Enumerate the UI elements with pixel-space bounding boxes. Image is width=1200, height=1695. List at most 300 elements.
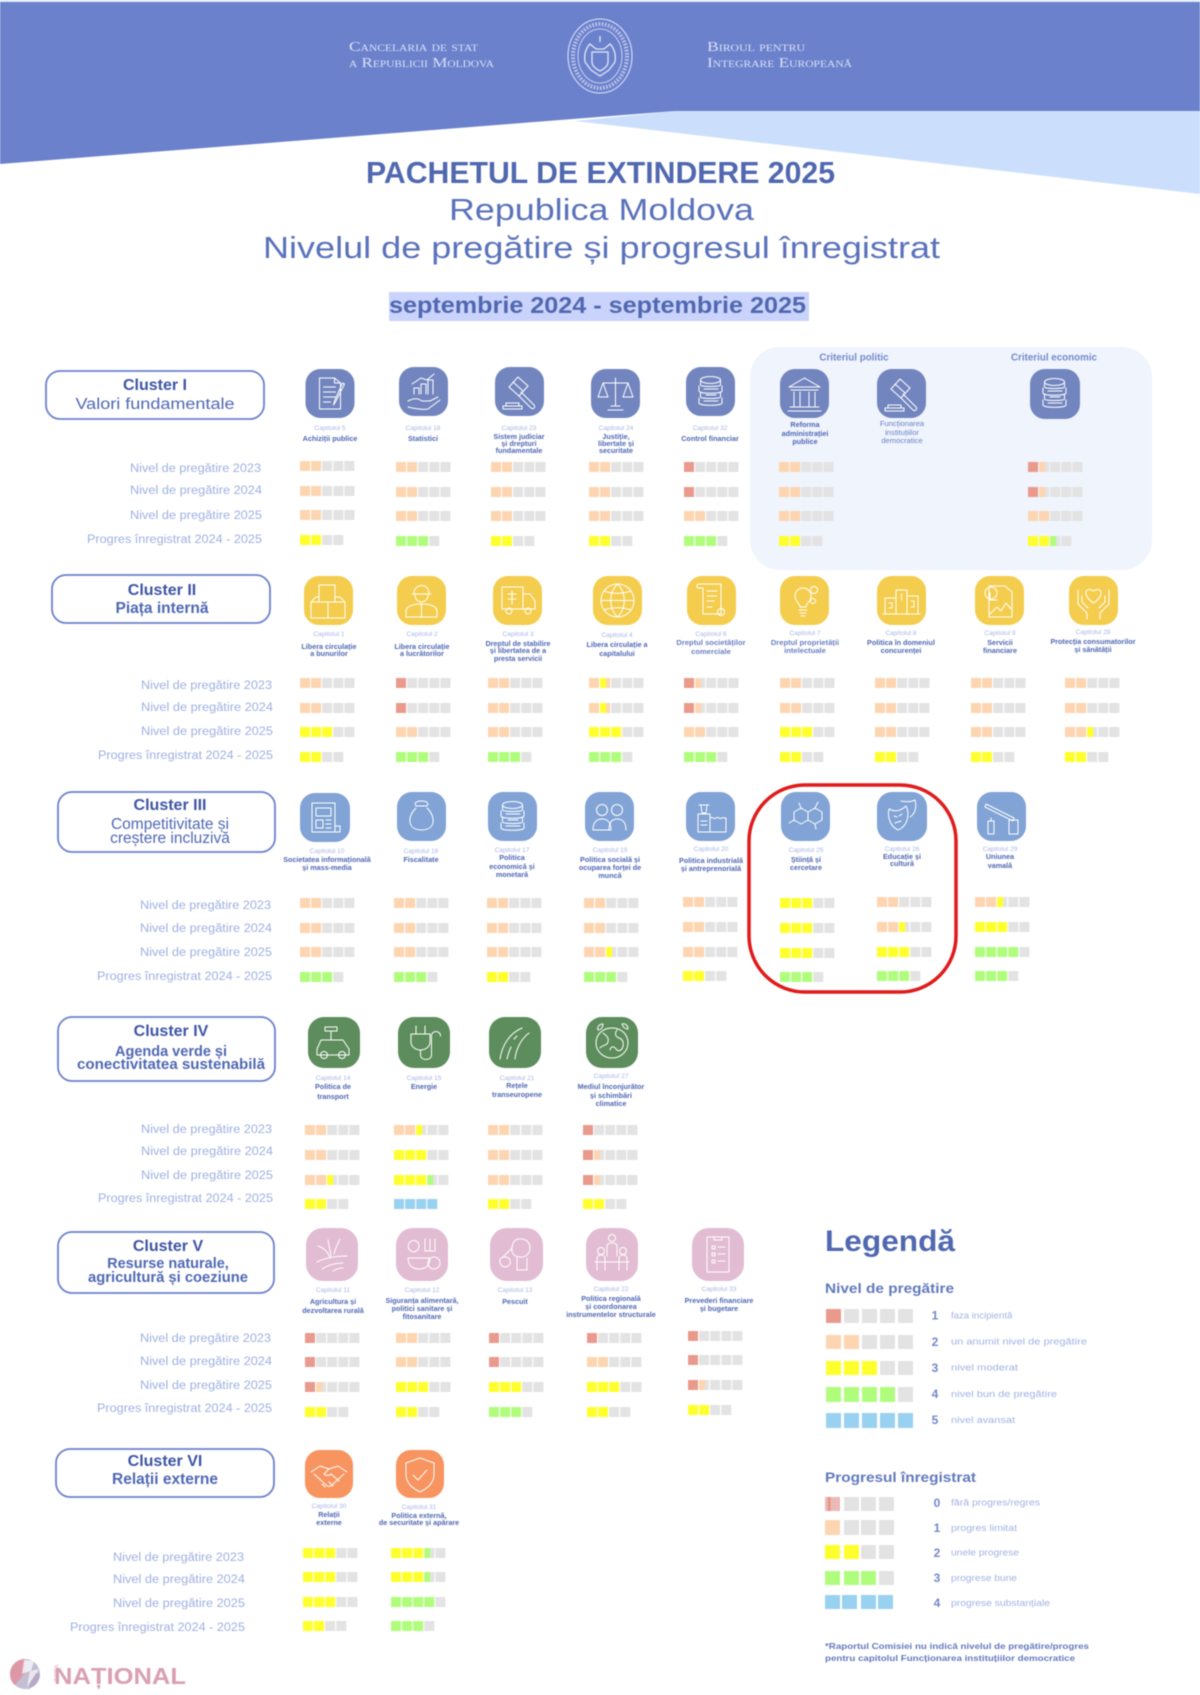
header text right: Biroul pentru Integrare Europeana: Biroul pentru xyxy=(707,39,806,54)
caption: a lucrătorilor xyxy=(400,649,444,658)
caption xyxy=(586,632,649,658)
icon: coins xyxy=(488,792,537,841)
legend row 3 xyxy=(826,1361,1018,1375)
legend progress row 1: progres limitat xyxy=(951,1523,1017,1534)
caption xyxy=(681,425,739,443)
caption: Capitolul 17 xyxy=(495,847,530,854)
caption: a bunurilor xyxy=(310,649,348,658)
icon: podium xyxy=(877,576,926,625)
caption: Capitolul 33 xyxy=(702,1286,737,1293)
chapter 31 xyxy=(379,1450,459,1631)
caption: Capitolul 28 xyxy=(1076,629,1111,636)
caption: Capitolul 29 xyxy=(983,846,1018,853)
chapter 10 xyxy=(283,793,372,982)
caption: Capitolul 1 xyxy=(313,631,345,638)
caption: Control financiar xyxy=(681,434,739,443)
caption: Capitolul 18 xyxy=(406,425,441,432)
caption: climatice xyxy=(596,1099,626,1108)
chapter 30 xyxy=(303,1450,357,1631)
functioning of democratic institutions xyxy=(877,369,926,445)
legend progress row 0: 0 xyxy=(934,1496,941,1510)
ratings xyxy=(396,462,450,546)
caption: Capitolul 9 xyxy=(984,630,1016,637)
chapter 33 xyxy=(685,1228,753,1415)
ratings xyxy=(300,461,354,545)
legend row 4: 4 xyxy=(932,1387,939,1401)
legend progress row 1 xyxy=(825,1520,1017,1535)
caption: Politica în domeniul xyxy=(867,638,935,647)
header text right: Biroul pentru Integrare Europeana xyxy=(707,39,853,70)
row labels: Nivel de pregătire 2024 xyxy=(141,1146,274,1158)
ratings xyxy=(584,898,638,982)
cluster label: Agenda verde și xyxy=(115,1044,227,1060)
ratings xyxy=(489,1333,543,1417)
ratings xyxy=(684,462,738,546)
chapter 12 xyxy=(385,1228,459,1417)
caption: Protecția consumatorilor xyxy=(1050,637,1136,646)
caption xyxy=(302,1287,365,1315)
legend row 2: 2 xyxy=(932,1335,939,1349)
icon: molecule xyxy=(781,792,830,841)
chapter 14 xyxy=(305,1017,360,1209)
caption: Energie xyxy=(411,1082,437,1091)
cluster label: Cluster VI xyxy=(128,1453,202,1470)
cluster label: Valori fundamentale xyxy=(76,396,234,413)
legend progress row 2: unele progrese xyxy=(951,1548,1019,1558)
icon: checklist xyxy=(692,1228,744,1281)
highlight: red rounded outline xyxy=(749,785,956,992)
caption: Capitolul 27 xyxy=(594,1073,629,1080)
caption: Capitolul 16 xyxy=(404,848,439,855)
caption xyxy=(883,846,921,868)
header band xyxy=(0,0,1200,194)
caption: fundamentale xyxy=(496,446,542,455)
icon: food basket xyxy=(396,1228,448,1281)
cluster label: Resurse naturale, xyxy=(107,1256,229,1272)
caption: și bugetare xyxy=(700,1304,738,1313)
caption: Capitolul 13 xyxy=(498,1287,533,1294)
caption: Prevederi financiare xyxy=(685,1296,753,1305)
caption xyxy=(312,1503,347,1527)
cluster label xyxy=(46,371,264,419)
caption: Capitolul 22 xyxy=(594,1286,629,1293)
caption xyxy=(303,425,357,443)
caption xyxy=(489,847,535,879)
legend progress row 4 xyxy=(825,1595,1050,1610)
caption: Siguranța alimentară, xyxy=(385,1296,459,1305)
caption: libertate și xyxy=(598,439,634,448)
row labels xyxy=(98,680,274,762)
legend progress row 2 xyxy=(825,1545,1019,1560)
caption: muncă xyxy=(598,871,623,880)
icon: gavel xyxy=(877,369,926,418)
legend row 3: 3 xyxy=(932,1361,939,1375)
cluster label: Cluster IV xyxy=(134,1023,209,1040)
caption: publice xyxy=(792,437,818,446)
chapter 27 xyxy=(578,1017,645,1209)
caption xyxy=(983,630,1017,655)
caption xyxy=(579,847,641,880)
ratings xyxy=(394,898,448,982)
legend row 5 xyxy=(826,1413,1015,1428)
icon: people xyxy=(585,792,634,841)
legend progress row 4: 4 xyxy=(934,1596,941,1610)
ratings xyxy=(394,1125,448,1209)
icon: document xyxy=(306,369,354,418)
legend progress row 3: 3 xyxy=(934,1571,941,1585)
chapter 6 xyxy=(676,576,746,762)
legend row 1 xyxy=(826,1308,1013,1323)
legend row 2: un anumit nivel de pregătire xyxy=(951,1336,1087,1348)
ratings xyxy=(877,897,931,981)
chapter 7 xyxy=(771,576,839,762)
legend title: Legendă xyxy=(825,1225,955,1258)
caption xyxy=(379,1504,459,1527)
caption: Capitolul 31 xyxy=(402,1504,437,1511)
caption: Rețele xyxy=(506,1081,528,1090)
heading: economic criterion: Criteriul economic xyxy=(1011,352,1098,364)
caption: Libera circulație xyxy=(394,642,450,651)
ratings xyxy=(583,1125,637,1209)
row labels: Nivel de pregătire 2025 xyxy=(141,1170,273,1182)
icon: boxes xyxy=(304,576,353,625)
caption xyxy=(394,631,450,658)
public administration reform xyxy=(779,369,833,546)
chapter 15 xyxy=(394,1017,450,1209)
caption: Educație și xyxy=(883,852,921,861)
row labels xyxy=(97,1333,273,1415)
icon: road xyxy=(489,1017,541,1068)
chapter 3 xyxy=(485,576,551,762)
ratings xyxy=(391,1548,445,1631)
ratings xyxy=(975,897,1029,981)
caption: Capitolul 24 xyxy=(599,425,634,432)
icon: coins xyxy=(1030,369,1080,419)
ratings xyxy=(300,898,354,982)
panel: legend xyxy=(825,1225,1089,1663)
caption xyxy=(789,847,824,872)
caption: politici sanitare și xyxy=(392,1304,452,1313)
caption: Capitolul 23 xyxy=(502,425,537,432)
ratings xyxy=(303,1548,357,1631)
cluster label: conectivitatea sustenabilă xyxy=(77,1057,266,1073)
icon: scales xyxy=(591,369,640,418)
ratings xyxy=(779,462,833,546)
caption xyxy=(782,420,828,446)
icon: field and wheat xyxy=(306,1228,358,1281)
dark blue wedge xyxy=(0,2,1200,164)
icon: gavel xyxy=(495,367,544,416)
legend progress row 0: fără progres/regres xyxy=(951,1498,1040,1508)
row labels: Nivel de pregătire 2025 xyxy=(141,726,273,738)
chapter 24 xyxy=(589,369,643,546)
icon: statistics xyxy=(399,367,448,416)
ratings xyxy=(1065,678,1119,762)
footnote: *Raportul Comisiei nu indică nivelul de pregătire/progres xyxy=(825,1641,1089,1651)
caption: ocuparea forței de xyxy=(579,863,641,872)
chapter 19 xyxy=(579,792,641,982)
legend row 1: faza incipientă xyxy=(951,1310,1013,1322)
caption: externe xyxy=(316,1518,342,1527)
panel: Cluster VI xyxy=(56,1449,459,1634)
caption xyxy=(566,1286,656,1319)
caption: și mass-media xyxy=(302,863,353,872)
row labels: Progres înregistrat 2024 - 2025 xyxy=(97,971,272,983)
caption: Societatea informațională xyxy=(283,855,372,864)
chapter 1 xyxy=(300,576,357,762)
legend progress row 1: 1 xyxy=(934,1521,941,1535)
icon: factory xyxy=(686,792,735,841)
icon: plug xyxy=(398,1017,450,1068)
caption: Capitolul 10 xyxy=(310,848,345,855)
icon: theatre masks xyxy=(877,792,927,841)
ratings xyxy=(875,678,929,762)
row labels: Nivel de pregătire 2023 xyxy=(113,1552,244,1564)
caption xyxy=(492,1075,542,1099)
ratings xyxy=(300,678,354,762)
header text right: Biroul pentru Integrare Europeana: Integrare Europeană xyxy=(707,55,853,70)
caption: Agricultura și xyxy=(310,1297,356,1306)
ratings xyxy=(971,678,1025,762)
ratings xyxy=(491,462,545,546)
row labels xyxy=(98,1124,274,1205)
cluster label: agricultură și coeziune xyxy=(88,1270,248,1286)
logo: Ziarul National watermark xyxy=(10,1659,186,1689)
chapter 22 xyxy=(566,1228,656,1417)
footnote xyxy=(825,1641,1089,1663)
caption: Reforma xyxy=(790,420,821,429)
cluster label xyxy=(58,1232,274,1293)
caption: Capitolul 11 xyxy=(316,1287,350,1294)
caption: Statistici xyxy=(408,434,438,443)
row labels: Nivel de pregătire 2025 xyxy=(113,1598,245,1610)
legend row 1: 1 xyxy=(932,1308,939,1322)
logo: Ziarul National watermark: ZIARUL xyxy=(54,1664,60,1682)
cluster label xyxy=(58,1017,275,1081)
chapter 13 xyxy=(489,1228,543,1417)
caption: și coordonarea xyxy=(585,1302,638,1311)
caption xyxy=(385,1287,459,1321)
caption: Capitolul 19 xyxy=(593,847,628,854)
caption: Capitolul 4 xyxy=(601,632,633,639)
caption: Politica externă, xyxy=(391,1511,447,1520)
chapter 26 xyxy=(877,792,931,981)
caption: și drepturi xyxy=(501,439,537,448)
legend row 5: 5 xyxy=(932,1413,939,1427)
icon: heart in hands xyxy=(1069,576,1118,625)
ratings xyxy=(683,897,737,981)
caption xyxy=(1050,629,1136,654)
caption: Capitolul 26 xyxy=(885,846,920,853)
caption: economică și xyxy=(489,862,535,871)
caption: Mediul înconjurător xyxy=(578,1082,645,1091)
caption: și schimbări xyxy=(590,1091,632,1100)
icon: light bulb xyxy=(780,576,829,625)
ratings xyxy=(488,678,542,762)
caption: capitalului xyxy=(599,649,635,658)
caption xyxy=(578,1073,645,1108)
caption xyxy=(983,846,1018,870)
caption: Funcționarea xyxy=(880,419,925,428)
row labels: Progres înregistrat 2024 - 2025 xyxy=(97,1403,272,1415)
icon: worker xyxy=(397,576,446,625)
caption: Servicii xyxy=(987,638,1013,647)
ratings xyxy=(305,1125,359,1209)
caption xyxy=(283,848,372,872)
caption: Dreptul societăților xyxy=(676,638,746,647)
ratings xyxy=(1028,462,1082,546)
panel: Cluster IV xyxy=(58,1017,645,1209)
caption: Libera circulație a xyxy=(586,640,649,649)
cluster label xyxy=(52,575,270,623)
caption: Capitolul 14 xyxy=(316,1075,351,1082)
icon: earth and leaves xyxy=(586,1017,638,1068)
heading: political criterion: Criteriul politic xyxy=(819,352,889,364)
chapter 32 xyxy=(681,367,739,546)
icon: globe xyxy=(593,576,642,625)
icon: newspaper xyxy=(300,793,350,842)
chapter 28 xyxy=(1050,576,1136,762)
cluster label xyxy=(56,1449,274,1497)
row labels: Nivel de pregătire 2023 xyxy=(141,680,272,692)
caption xyxy=(493,425,545,455)
ratings xyxy=(305,1333,359,1417)
cluster label: creștere incluzivă xyxy=(110,830,230,847)
caption: transeuropene xyxy=(492,1090,542,1099)
header text left: Cancelaria de Stat: a Republicii Moldova xyxy=(349,55,495,70)
caption: Capitolul 3 xyxy=(502,631,534,638)
icon: institution xyxy=(780,369,829,418)
icon: coins xyxy=(686,367,735,416)
caption xyxy=(771,630,839,655)
row labels xyxy=(97,900,273,983)
legend heading: progress: Progresul înregistrat xyxy=(825,1469,976,1485)
caption xyxy=(407,1075,442,1091)
ratings xyxy=(396,1333,450,1417)
legend progress row 3: progrese bune xyxy=(951,1573,1017,1584)
caption: Capitolul 5 xyxy=(314,425,346,432)
ratings xyxy=(589,678,643,762)
caption: presta servicii xyxy=(494,654,542,663)
caption xyxy=(679,846,744,873)
caption: democratice xyxy=(881,436,923,445)
icon: certificate xyxy=(687,576,736,625)
ratings xyxy=(396,678,450,762)
caption xyxy=(403,848,439,864)
title: PACHETUL DE EXTINDERE 2025 xyxy=(366,156,835,190)
caption: securitate xyxy=(599,446,633,455)
ratings xyxy=(487,898,541,982)
row labels: Nivel de pregătire 2024 xyxy=(140,1356,273,1368)
row labels: Progres înregistrat 2024 - 2025 xyxy=(70,1622,245,1634)
ratings xyxy=(688,1331,742,1415)
caption: Dreptul proprietății xyxy=(771,638,839,647)
chapter 23 xyxy=(491,367,545,546)
legend progress row 2: 2 xyxy=(934,1546,941,1560)
icon: car xyxy=(308,1017,360,1068)
row labels: Nivel de pregătire 2023 xyxy=(140,900,271,912)
row labels: Progres înregistrat 2024 - 2025 xyxy=(87,534,262,546)
row labels xyxy=(87,463,263,546)
caption: comerciale xyxy=(691,647,731,656)
row labels: Nivel de pregătire 2025 xyxy=(140,947,272,959)
chapter 25 xyxy=(780,792,834,982)
light blue wedge xyxy=(575,111,1200,194)
caption: Libera circulație xyxy=(301,642,357,651)
panel: Cluster V xyxy=(58,1228,753,1417)
cluster label: Cluster V xyxy=(133,1238,203,1255)
chapter 8 xyxy=(867,576,935,762)
panel: Cluster I xyxy=(46,367,1082,546)
logo: Ziarul National watermark: NAȚIONAL xyxy=(54,1663,186,1689)
cluster label: Competitivitate și xyxy=(111,816,229,833)
caption xyxy=(867,630,935,655)
period highlight: septembrie 2024 - septembrie 2025 xyxy=(389,292,806,318)
cluster label: Piața internă xyxy=(115,600,209,617)
icon: money bag xyxy=(397,792,446,841)
icon: state emblem xyxy=(568,19,632,93)
caption: Achiziții publice xyxy=(303,434,357,443)
chapter 20 xyxy=(679,792,744,981)
cluster label: Relații externe xyxy=(112,1471,218,1488)
caption: Sistem judiciar xyxy=(493,432,545,441)
row labels: Nivel de pregătire 2023 xyxy=(130,463,261,475)
icon: fish xyxy=(490,1228,543,1281)
caption xyxy=(498,1287,533,1306)
chapter 5 xyxy=(300,369,357,545)
caption: cercetare xyxy=(790,863,822,872)
panel: political and economic criteria xyxy=(750,347,1152,570)
row labels xyxy=(70,1552,246,1634)
caption: cultură xyxy=(890,859,915,868)
subtitle: topic: Nivelul de pregătire și progresul înregistrat xyxy=(263,230,940,265)
row labels: Nivel de pregătire 2023 xyxy=(140,1333,271,1345)
legend heading: readiness level: Nivel de pregătire xyxy=(825,1280,954,1296)
icon: handshake xyxy=(305,1450,353,1498)
legend progress row 4: progrese substanțiale xyxy=(951,1598,1050,1609)
caption: monetară xyxy=(496,870,529,879)
legend progress row 0 xyxy=(825,1496,1040,1511)
caption: Uniunea xyxy=(986,852,1015,861)
chapter 4 xyxy=(586,576,649,762)
caption: instituțiilor xyxy=(885,428,919,437)
row labels: Progres înregistrat 2024 - 2025 xyxy=(98,750,273,762)
row labels: Nivel de pregătire 2025 xyxy=(130,510,262,522)
caption: de securitate și apărare xyxy=(379,1518,459,1527)
caption xyxy=(676,631,746,656)
caption: dezvoltarea rurală xyxy=(302,1306,365,1315)
legend row 2 xyxy=(826,1335,1087,1349)
caption: administrației xyxy=(782,429,828,438)
caption: Politica socială și xyxy=(580,855,640,864)
row labels: Nivel de pregătire 2024 xyxy=(130,485,263,497)
caption: Capitolul 2 xyxy=(406,631,438,638)
chapter 16 xyxy=(394,792,448,982)
caption: Relații xyxy=(318,1510,340,1519)
icon: financial report xyxy=(975,576,1024,625)
chapter 29 xyxy=(975,792,1029,981)
caption: și libertatea de a xyxy=(490,646,547,655)
caption: fitosanitare xyxy=(403,1312,441,1321)
ratings xyxy=(488,1125,542,1209)
caption: financiare xyxy=(983,646,1017,655)
chapter 11 xyxy=(302,1228,365,1417)
caption: Capitolul 32 xyxy=(693,425,728,432)
chapter 21 xyxy=(488,1017,542,1209)
header text left: Cancelaria de Stat: Cancelaria de stat xyxy=(349,39,479,54)
ratings xyxy=(684,678,738,762)
caption: instrumentelor structurale xyxy=(566,1310,656,1319)
